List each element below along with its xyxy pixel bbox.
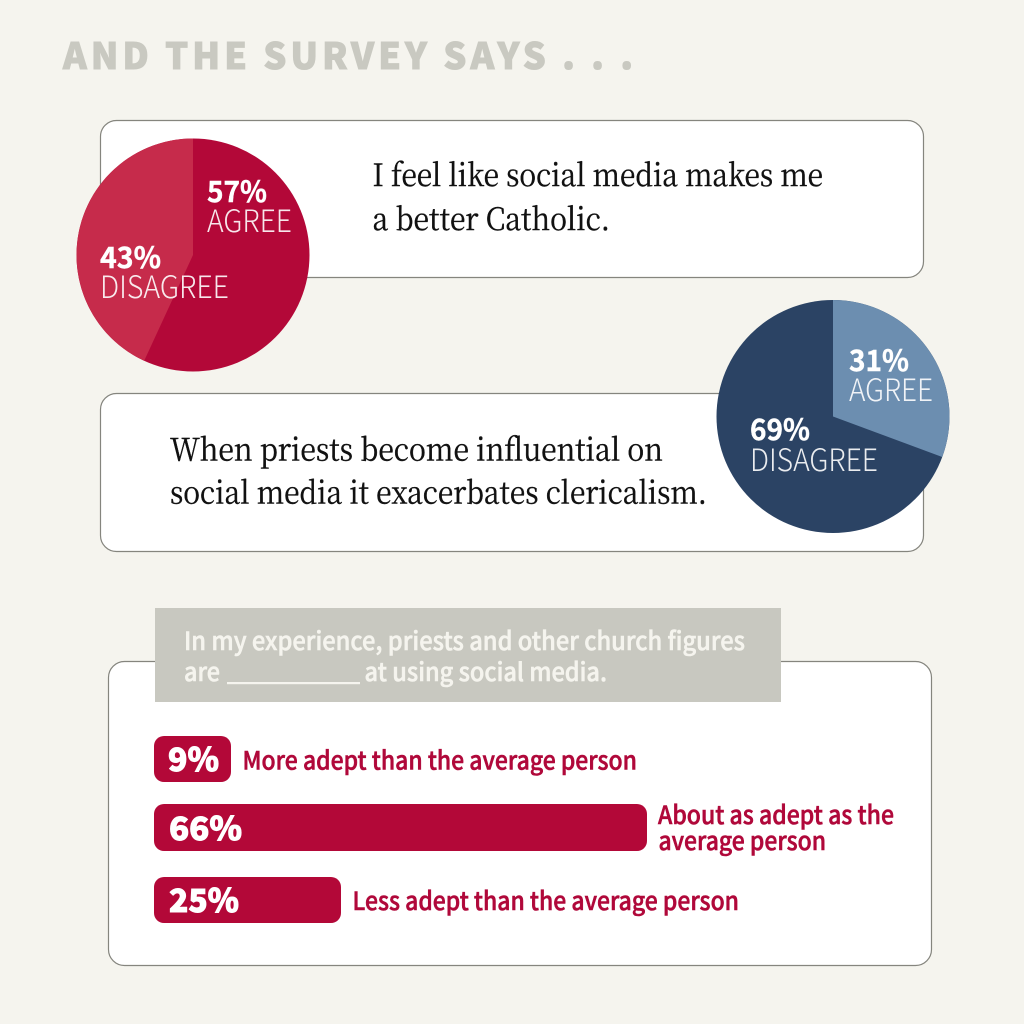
title: AND THE SURVEY SAYS . . . xyxy=(62,28,633,80)
bar: 25% less adept: 25% xyxy=(169,876,239,922)
pie chart: 31% agree, 69% disagree: 69% xyxy=(750,407,810,449)
bar: 25% less adept: Less adept than the average person xyxy=(352,882,739,918)
panel: bar chart card xyxy=(108,662,932,966)
statement: clericalism: When priests become influential on xyxy=(170,424,663,470)
statement: clericalism: social media it exacerbates clericalism. xyxy=(170,468,707,512)
statement: clericalism xyxy=(170,424,707,512)
statement: better Catholic xyxy=(372,150,823,239)
bar: 25% less adept xyxy=(154,876,739,923)
bar: 9% more adept: 9% xyxy=(168,735,219,781)
pie chart: 57% agree, 43% disagree: 57% xyxy=(207,169,267,211)
bar: 66% about as adept xyxy=(154,796,894,858)
question banner: In my experience, priests and other church figures xyxy=(184,622,745,658)
bar: 66% about as adept: 66% xyxy=(169,804,242,850)
panel: priests and clericalism xyxy=(100,394,924,552)
bar: 66% about as adept: About as adept as the xyxy=(658,796,894,832)
bar: 66% about as adept: average person xyxy=(658,822,826,858)
pie chart: 57% agree, 43% disagree: AGREE xyxy=(207,196,292,241)
pie chart: 31% agree, 69% disagree: DISAGREE xyxy=(750,435,878,480)
question banner xyxy=(155,608,781,702)
statement: better Catholic: I feel like social media makes me xyxy=(372,150,823,195)
pie chart: 57% agree, 43% disagree: 43% xyxy=(100,235,161,277)
bar: 9% more adept xyxy=(154,735,637,782)
question banner: at using social media. xyxy=(364,653,607,689)
statement: better Catholic: a better Catholic. xyxy=(372,194,610,239)
pie chart: 31% agree, 69% disagree xyxy=(716,300,950,533)
pie chart: 31% agree, 69% disagree: AGREE xyxy=(849,365,933,410)
panel: social media makes me a better Catholic xyxy=(100,120,924,278)
question banner: are xyxy=(184,653,220,689)
pie chart: 31% agree, 69% disagree: 31% xyxy=(849,338,909,380)
pie chart: 57% agree, 43% disagree: DISAGREE xyxy=(100,262,229,307)
pie chart: 57% agree, 43% disagree xyxy=(76,138,310,372)
bar: 9% more adept: More adept than the average person xyxy=(242,742,637,778)
